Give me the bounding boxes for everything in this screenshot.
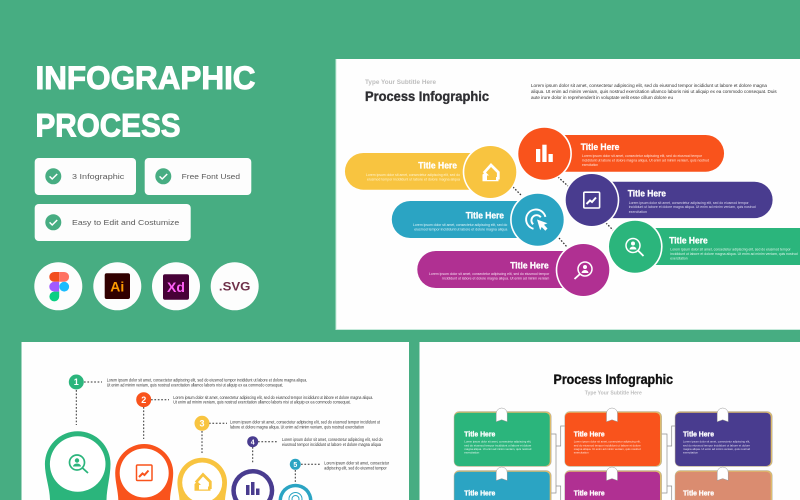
card: magenta: Title Here xyxy=(574,488,605,498)
feature badge: Easy to Edit and Costumize xyxy=(35,204,191,241)
step: orange: Title Here xyxy=(581,142,619,153)
panel heading: Type Your Subtitle Here xyxy=(365,79,436,86)
step: yellow xyxy=(345,144,518,200)
bookmark tab xyxy=(606,467,618,480)
step: magenta: incididunt ut labore et dolore magna aliqua. Ut enim ad minim veniam xyxy=(442,276,549,280)
icon: search user mirrored xyxy=(574,262,592,279)
step descriptions: Lorem ipsum dolor sit amet, consectetur adipiscing elit, sed do xyxy=(282,437,383,442)
step: yellow: Title Here xyxy=(418,161,457,172)
card: magenta xyxy=(565,467,662,500)
step: blue xyxy=(392,192,565,247)
number badge 2: 2 xyxy=(141,395,146,405)
icon: Adobe Illustrator: Ai xyxy=(110,278,124,294)
step: orange: exercitation xyxy=(582,163,598,167)
step: green: Lorem ipsum dolor sit amet, consectetur adipiscing elit, sed do eiusmod tempor xyxy=(670,248,791,252)
pin: purple xyxy=(231,469,274,500)
step descriptions: Lorem ipsum dolor sit amet, consectetur adipiscing elit, sed do eiusmod tempor incididunt ut labore et dolore magna aliqua. xyxy=(173,395,373,400)
card: green: exercitation xyxy=(464,451,480,455)
step: magenta: Lorem ipsum dolor sit amet, consectetur adipiscing elit, sed do eiusmod tempor xyxy=(429,272,550,276)
step descriptions: eiusmod tempor incididunt ut labore et dolore magna aliqua xyxy=(282,442,381,447)
step: purple: Title Here xyxy=(628,189,666,200)
step descriptions: Lorem ipsum dolor sit amet, consectetur adipiscing elit, sed do eiusmod tempor incididunt ut labore et dolore magna aliqua. xyxy=(107,378,307,382)
number badge 4 xyxy=(247,436,258,447)
step: blue: eiusmod tempor incididunt ut labore et dolore magna aliqua xyxy=(414,228,508,232)
feature badge: 3 Infographic xyxy=(35,158,136,195)
icon: Figma xyxy=(34,262,82,310)
panel heading: Process Infographic xyxy=(365,88,489,104)
icon: Adobe Illustrator xyxy=(93,262,141,310)
card: green: Lorem ipsum dolor sit amet, consectetur adipiscing elit, xyxy=(464,440,531,444)
card: purple: Title Here xyxy=(683,429,714,438)
card: green: sed do eiusmod tempor incididunt ut labore et dolore xyxy=(464,443,532,447)
intro paragraph xyxy=(531,83,777,100)
pin: blue xyxy=(278,484,312,500)
step: green: exercitation xyxy=(670,256,688,260)
intro paragraph: Lorem ipsum dolor sit amet, consectetur adipiscing elit, sed do eiusmod tempor incididunt ut labore et dolore magna xyxy=(531,83,767,88)
step: orange: incididunt ut labore et dolore magna aliqua. Ut enim ad minim veniam, quis nostrud xyxy=(582,159,709,163)
number badge 1: 1 xyxy=(74,377,79,387)
card: orange: magna aliqua. Ut enim ad minim veniam, quis nostrud xyxy=(574,447,641,451)
icon: SVG format xyxy=(211,262,259,310)
pin: orange xyxy=(115,444,173,500)
step: purple: exercitation xyxy=(629,210,647,214)
step: purple: Lorem ipsum dolor sit amet, consectetur adipiscing elit, sed do eiusmod tempor xyxy=(629,201,749,205)
step: orange: Lorem ipsum dolor sit amet, consectetur adipiscing elit, sed do eiusmod tempor xyxy=(582,154,703,158)
icon: Adobe XD: Xd xyxy=(167,279,185,295)
card: blue: Title Here xyxy=(464,488,495,498)
number badge 2 xyxy=(136,392,151,407)
panel: process infographic circles xyxy=(336,59,800,330)
step: yellow: eiusmod tempor incididunt ut labore et dolore magna aliqua xyxy=(367,178,461,182)
bookmark tab xyxy=(496,408,507,422)
card: orange: Lorem ipsum dolor sit amet, consectetur adipiscing elit, xyxy=(574,440,641,444)
step: purple xyxy=(564,172,773,228)
number badge 5 xyxy=(290,459,301,470)
card: purple xyxy=(675,408,772,466)
bookmark tab xyxy=(606,408,618,422)
number badge 4: 4 xyxy=(251,439,255,446)
icon: SVG format: .SVG xyxy=(219,280,250,294)
main heading: INFOGRAPHIC xyxy=(36,60,256,96)
step descriptions: Ut enim ad minim veniam, quis nostrud exercitation ullamco laboris nisi ut aliquip ex ea commodo consequat. xyxy=(173,400,351,404)
step: yellow: Lorem ipsum dolor sit amet, consectetur adipiscing elit, sed do xyxy=(366,173,460,177)
step descriptions: Lorem ipsum dolor sit amet, consectetur adipiscing elit, sed do eiusmod tempor incididunt ut xyxy=(230,420,381,424)
step: purple: incididunt ut labore et dolore magna aliqua. Ut enim ad minim veniam, quis nostrud xyxy=(629,205,756,209)
card: orange: sed do eiusmod tempor incididunt ut labore et dolore xyxy=(574,443,641,447)
icon: target xyxy=(289,492,302,500)
bookmark tab xyxy=(496,467,507,480)
panel: numbered process pins xyxy=(22,342,409,500)
panel: process card grid xyxy=(420,342,800,500)
step descriptions xyxy=(107,378,389,470)
icon: search user xyxy=(70,455,88,473)
dotted connectors xyxy=(513,177,613,247)
icon: Adobe XD xyxy=(152,262,200,310)
card: orange xyxy=(565,408,662,466)
step descriptions: labore et dolore magna aliqua. Ut enim ad minim veniam, quis nostrud exercitation xyxy=(230,424,364,430)
intro paragraph: aliqua. Ut enim ad minim veniam, quis nostrud exercitation ullamco laboris nisi ut aliquip ex ea commodo consequat. Duis xyxy=(531,89,777,94)
icon: growth chart xyxy=(136,465,152,480)
step: magenta: Title Here xyxy=(510,261,549,272)
icon: home xyxy=(194,474,210,491)
card: orange: Title Here xyxy=(574,429,605,438)
step: green: Title Here xyxy=(669,235,708,246)
card: salmon xyxy=(675,467,772,500)
icon: bar chart xyxy=(246,482,260,495)
card: salmon: Title Here xyxy=(683,488,714,498)
number badge 1 xyxy=(69,374,84,390)
number badge 3 xyxy=(194,416,210,431)
panel heading: Type Your Subtitle Here xyxy=(585,390,642,396)
icon: bar chart xyxy=(536,145,553,162)
card: blue xyxy=(454,467,551,500)
step descriptions: Ut enim ad minim veniam, quis nostrud exercitation ullamco laboris nisi ut aliquip ex ea commodo consequat. xyxy=(107,382,283,388)
card: green xyxy=(454,408,551,466)
pin: green xyxy=(45,431,110,500)
main heading: PROCESS xyxy=(36,108,180,144)
feature badge: Easy to Edit and Costumize: Easy to Edit and Costumize xyxy=(72,218,179,227)
feature badge: 3 Infographic: 3 Infographic xyxy=(72,172,125,181)
step: green xyxy=(607,219,800,274)
step descriptions: adipiscing elit, sed do eiusmod tempor xyxy=(324,466,387,470)
icon: target cursor xyxy=(526,209,548,231)
panel heading: Process Infographic xyxy=(554,372,673,387)
step descriptions: Lorem ipsum dolor sit amet, consectetur xyxy=(324,460,389,466)
dotted leader lines xyxy=(76,382,320,482)
card: purple: exercitation xyxy=(683,451,698,455)
number badge 3: 3 xyxy=(199,418,205,428)
step: blue: Title Here xyxy=(466,211,504,222)
panel heading xyxy=(554,372,673,396)
card: green: magna aliqua. Ut enim ad minim veniam, quis nostrud xyxy=(464,447,532,451)
main heading xyxy=(36,60,256,144)
step: magenta xyxy=(417,242,611,298)
card: purple: magna aliqua. Ut enim ad minim veniam, quis nostrud xyxy=(683,447,750,451)
connector lines xyxy=(551,426,675,500)
icon: search user xyxy=(626,238,644,256)
card: green: Title Here xyxy=(464,429,495,438)
feature badge: Free Font Used: Free Font Used xyxy=(182,172,240,181)
bookmark tab xyxy=(717,467,728,480)
panel heading xyxy=(365,79,489,104)
icon: growth chart xyxy=(584,192,600,208)
step: blue: Lorem ipsum dolor sit amet, consectetur adipiscing elit, sed do xyxy=(413,223,507,227)
card: purple: sed do eiusmod tempor incididunt ut labore et dolore xyxy=(683,443,750,447)
card: purple: Lorem ipsum dolor sit amet, consectetur adipiscing elit, xyxy=(683,440,750,444)
bookmark tab xyxy=(717,408,728,422)
icon: home xyxy=(482,165,498,181)
number badge 5: 5 xyxy=(293,462,297,469)
intro paragraph: aute irure dolor in reprehenderit in voluptate velit esse cillum dolore eu xyxy=(531,95,673,100)
step: orange xyxy=(517,126,724,181)
feature badge: Free Font Used xyxy=(145,158,251,195)
pin: yellow xyxy=(177,458,227,500)
card: orange: exercitation xyxy=(574,451,589,455)
